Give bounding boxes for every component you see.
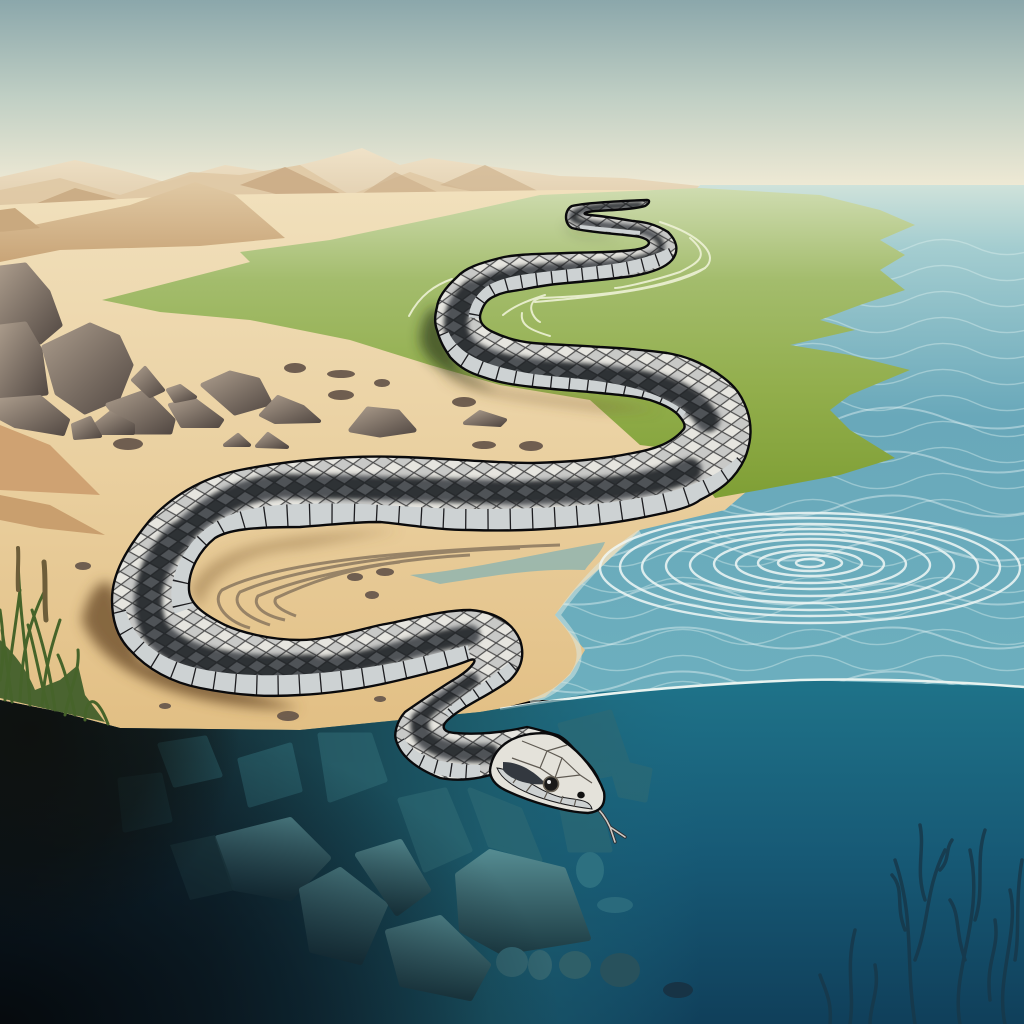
body outline [112,200,751,812]
labial scales [497,768,592,809]
snake head [490,733,604,813]
seaweed [820,825,1022,1024]
snake body [100,190,770,812]
grass slither lines [409,222,710,336]
water surface [480,185,1024,700]
body silhouette [112,200,751,812]
belly band [116,227,745,772]
nostril [577,792,585,798]
underwater rocks [0,695,700,1024]
scale markings [113,201,750,778]
sand ripple trails [218,545,560,628]
ripple rings [600,513,1020,623]
shoreline foam [530,532,640,702]
waterline [500,679,1024,709]
sky [0,0,1024,195]
pebbles [75,363,543,721]
underwater [0,680,1024,1024]
grassland [102,188,915,498]
snake tongue [592,803,625,842]
belly scale dividers [116,254,745,772]
eye stripe [503,762,546,784]
distant dunes [0,148,700,230]
foreground dune [0,182,285,535]
snake ground shadow [82,225,660,708]
wet sand inlet [410,542,605,584]
sand beach [0,190,760,732]
sand rocks [0,265,505,447]
foreground grass tuft [0,548,108,724]
head scale lines [512,741,592,807]
eye [544,776,558,792]
